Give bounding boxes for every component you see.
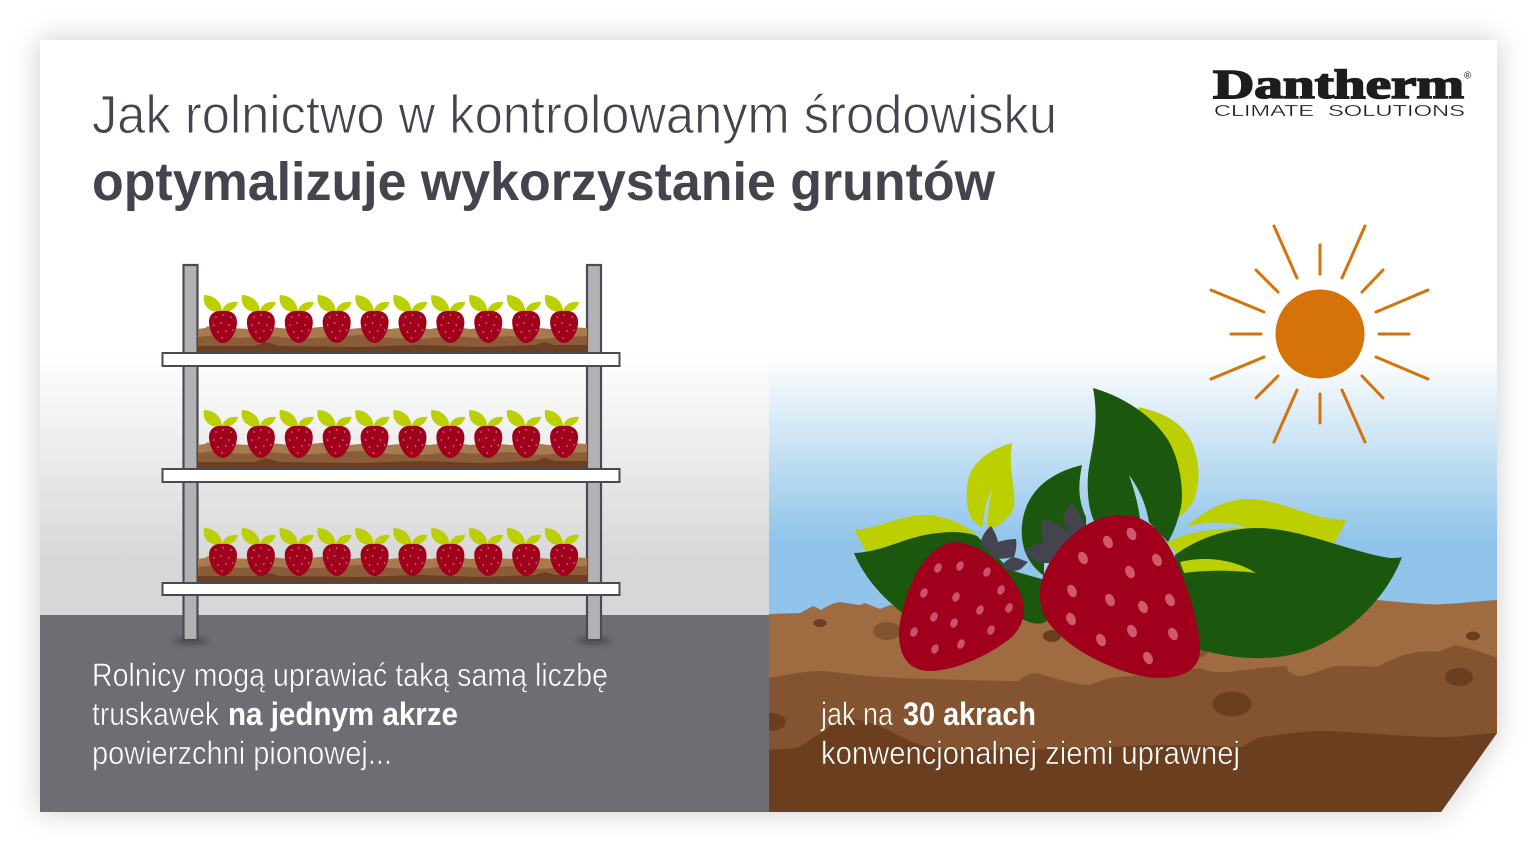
panel: conventional field bbox=[756, 355, 1497, 812]
text block: conventional land bbox=[820, 696, 1240, 771]
large strawberry plant bbox=[854, 388, 1402, 678]
back leaves bbox=[854, 388, 1402, 658]
logo: Dantherm: CLIMATE bbox=[1214, 103, 1314, 120]
panel: vertical farm bbox=[40, 265, 769, 812]
text block: vertical farming bbox=[92, 657, 608, 771]
logo: Dantherm: Dantherm bbox=[1213, 61, 1464, 107]
shelf 2 strawberries bbox=[198, 442, 587, 469]
shelf 3 strawberries bbox=[198, 556, 587, 583]
text block: vertical farming: na jednym akrze bbox=[228, 696, 458, 732]
title bbox=[92, 85, 1057, 212]
logo: Dantherm bbox=[1213, 61, 1472, 120]
text block: vertical farming: powierzchni pionowej... bbox=[92, 735, 392, 771]
text block: vertical farming: Rolnicy mogą uprawiać taką samą liczbę bbox=[92, 657, 608, 693]
logo: Dantherm: ® bbox=[1464, 70, 1472, 82]
text block: conventional land: jak na bbox=[820, 696, 893, 732]
shelf rack bbox=[162, 265, 620, 645]
sepals bbox=[981, 503, 1084, 571]
small strawberry bbox=[899, 542, 1024, 671]
big strawberry bbox=[1040, 515, 1200, 678]
title: Jak rolnictwo w kontrolowanym środowisku bbox=[92, 85, 1057, 145]
text block: conventional land: 30 akrach bbox=[903, 696, 1036, 732]
logo: Dantherm: SOLUTIONS bbox=[1328, 103, 1465, 120]
text block: conventional land: konwencjonalnej ziemi uprawnej bbox=[821, 735, 1240, 771]
shelf 1 strawberries bbox=[198, 295, 587, 353]
text block: vertical farming: truskawek bbox=[92, 696, 220, 732]
title: optymalizuje wykorzystanie gruntów bbox=[92, 152, 996, 212]
icon: sun bbox=[1211, 226, 1428, 442]
